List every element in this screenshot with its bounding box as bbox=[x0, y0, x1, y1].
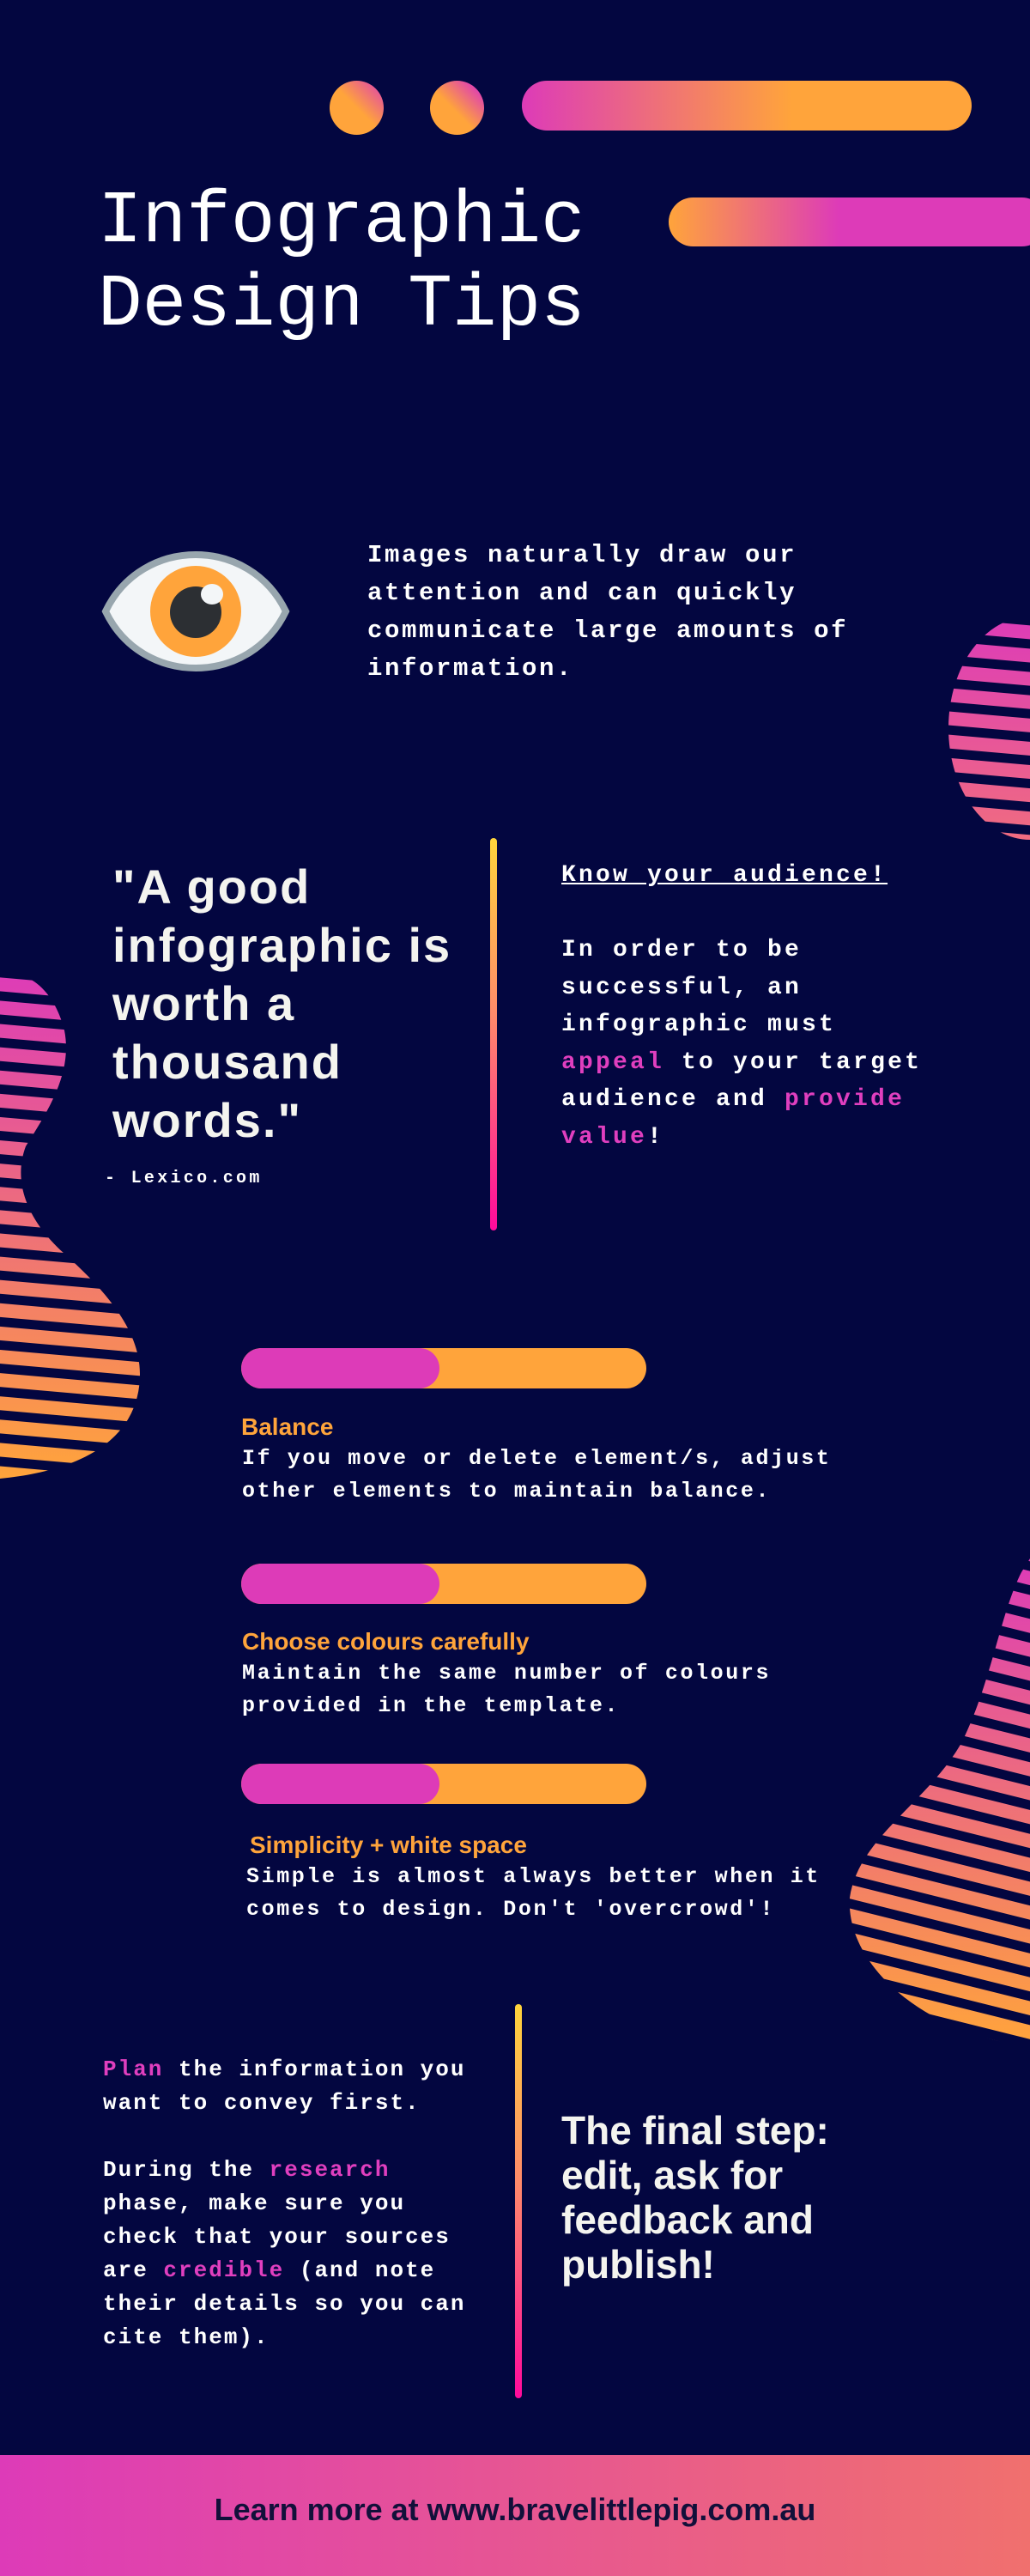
title bbox=[98, 179, 585, 347]
decorative striped blobs bbox=[0, 623, 1030, 2041]
text: plan and research: phase, make sure you bbox=[103, 2190, 405, 2216]
text: final step: publish! bbox=[561, 2242, 715, 2287]
footer bbox=[0, 2455, 1030, 2576]
text: plan and research: their details so you can bbox=[103, 2291, 465, 2317]
text: plan and research bbox=[103, 2057, 465, 2350]
divider: final section bbox=[515, 2004, 522, 2398]
quote: words." bbox=[112, 1093, 302, 1147]
text: know your audience: infographic must bbox=[561, 1012, 836, 1038]
text: images draw attention: information. bbox=[367, 654, 573, 683]
text: plan and research: Plan the information you bbox=[103, 2057, 465, 2082]
text: images draw attention bbox=[367, 541, 848, 683]
text: know your audience: In order to be bbox=[561, 937, 802, 963]
text: know your audience: value! bbox=[561, 1123, 664, 1151]
text: know your audience: successful, an bbox=[561, 974, 802, 1001]
tip 2: colours bbox=[241, 1564, 771, 1718]
text: final step: edit, ask for bbox=[561, 2153, 783, 2197]
text: know your audience bbox=[561, 862, 922, 1151]
tip 1: balance bbox=[241, 1348, 831, 1504]
quote: infographic is bbox=[112, 918, 451, 972]
text: plan and research: During the research bbox=[103, 2157, 390, 2183]
tip 2: colours: Maintain the same number of colours bbox=[242, 1661, 771, 1686]
tip 3: simplicity bbox=[241, 1764, 821, 1922]
tip 1: balance: other elements to maintain balance. bbox=[242, 1479, 771, 1504]
quote source: - Lexico.com bbox=[105, 1169, 263, 1188]
tip 3: simplicity: comes to design. Don't 'overcrowd'! bbox=[246, 1897, 775, 1922]
text: images draw attention: Images naturally draw our bbox=[367, 541, 797, 569]
title: Design Tips bbox=[98, 263, 585, 347]
text: plan and research: cite them). bbox=[103, 2324, 270, 2350]
quote: "A good bbox=[112, 860, 311, 914]
footer: Learn more at www.bravelittlepig.com.au bbox=[215, 2492, 815, 2527]
quote: thousand bbox=[112, 1035, 342, 1089]
divider: quote section bbox=[490, 838, 497, 1230]
tip 3: simplicity: Simplicity + white space bbox=[250, 1832, 527, 1858]
quote bbox=[112, 860, 451, 1147]
blob: top right bbox=[948, 617, 1030, 840]
text: final step bbox=[561, 2108, 829, 2287]
quote: worth a bbox=[112, 976, 295, 1030]
text: know your audience: appeal to your target bbox=[561, 1049, 922, 1075]
tip 2: colours: provided in the template. bbox=[242, 1693, 620, 1718]
tip 3: simplicity: Simple is almost always better when it bbox=[246, 1864, 821, 1889]
text: final step: The final step: bbox=[561, 2108, 829, 2153]
tip 2: colours: Choose colours carefully bbox=[242, 1628, 530, 1655]
blob: left bbox=[0, 971, 140, 1479]
text: images draw attention: attention and can quickly bbox=[367, 579, 797, 607]
blob: right lower bbox=[850, 1558, 1030, 2046]
text: plan and research: are credible (and note bbox=[103, 2257, 435, 2283]
text: know your audience: audience and provide bbox=[561, 1086, 905, 1113]
tip 1: balance: Balance bbox=[241, 1413, 333, 1440]
text: plan and research: check that your sources bbox=[103, 2224, 451, 2250]
tip 1: balance: If you move or delete element/s, adjust bbox=[242, 1446, 831, 1471]
text: final step: feedback and bbox=[561, 2197, 814, 2242]
text: plan and research: want to convey first. bbox=[103, 2090, 421, 2116]
text: images draw attention: communicate large amounts of bbox=[367, 617, 848, 645]
decoration: top dots and bars bbox=[330, 81, 1030, 246]
title: Infographic bbox=[98, 179, 585, 264]
icon: eye bbox=[101, 551, 290, 671]
text: know your audience: Know your audience! bbox=[561, 862, 888, 889]
